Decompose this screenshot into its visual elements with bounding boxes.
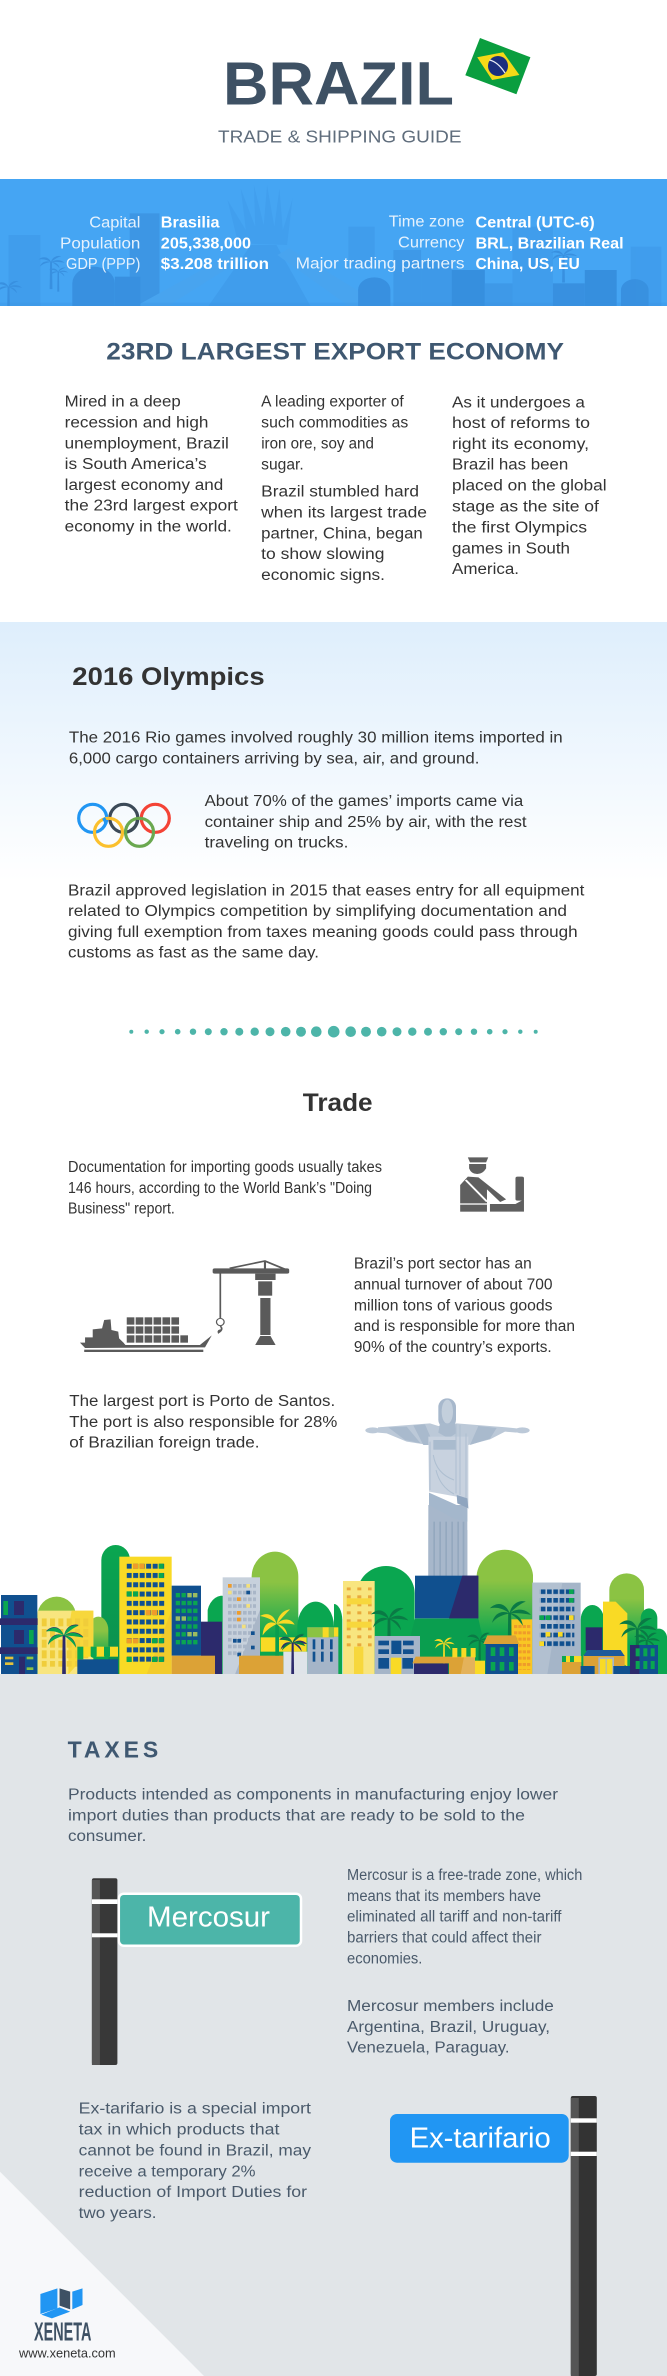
left facts: Capital — [89, 214, 140, 231]
text column 2: partner, China, began — [261, 525, 423, 542]
heading: Trade: Trade — [303, 1089, 373, 1117]
paragraph: legislation — [68, 882, 585, 962]
logo: Xeneta — [18, 2288, 116, 2360]
building: gray low — [375, 1636, 420, 1674]
building: gray tower — [223, 1577, 260, 1674]
left facts: GDP (PPP) — [66, 256, 140, 273]
paragraph: Ex-tarifario definition: reduction of Import Duties for — [79, 2184, 307, 2201]
text column 1: largest economy and — [65, 477, 223, 494]
paragraph: taxes intro: import duties than products that are ready to be sold to the — [68, 1807, 525, 1824]
building: yellow tower — [119, 1557, 172, 1674]
right facts — [296, 214, 624, 273]
paragraph: items imported: 6,000 cargo containers arriving by sea, air, and ground. — [69, 750, 479, 767]
palm: dark — [279, 1635, 307, 1680]
title: BRAZIL — [223, 50, 454, 118]
dotted divider — [129, 1026, 538, 1037]
paragraph: taxes intro — [68, 1786, 558, 1845]
text column 3: the first Olympics — [452, 519, 587, 536]
paragraph: taxes intro: consumer. — [68, 1828, 146, 1845]
small awning shop — [562, 1656, 581, 1674]
heading: 2016 Olympics: 2016 Olympics — [72, 663, 265, 691]
blue building right — [630, 1645, 658, 1674]
subtitle: TRADE & SHIPPING GUIDE — [218, 127, 462, 147]
text column 3: stage as the site of — [452, 499, 600, 516]
paragraph: Porto de Santos: of Brazilian foreign trade. — [69, 1435, 260, 1452]
paragraph: items imported: The 2016 Rio games involved roughly 30 million items imported in — [69, 730, 563, 747]
icon: customs officer — [460, 1157, 524, 1212]
paragraph: Mercosur definition: barriers that could affect their — [347, 1930, 542, 1947]
sign: Ex-tarifario: Ex-tarifario — [410, 2123, 551, 2155]
text column 2: sugar. — [261, 456, 304, 473]
building: dark blue — [0, 1595, 39, 1674]
right facts: Major trading partners — [296, 255, 465, 272]
text column 3: As it undergoes a — [452, 394, 585, 411]
paragraph: Mercosur definition: means that its members have — [347, 1888, 541, 1905]
ship — [80, 1317, 212, 1352]
paragraph: import shares: About 70% of the games’ imports came via — [205, 793, 524, 810]
paragraph: taxes intro: Products intended as components in manufacturing enjoy lower — [68, 1786, 558, 1803]
text column 3: America. — [452, 561, 519, 578]
sign: Mercosur: Mercosur — [147, 1902, 270, 1934]
icon: Olympic rings — [79, 804, 169, 846]
crane — [213, 1261, 289, 1345]
text column 1: recession and high — [65, 414, 208, 431]
building: pale yellow — [38, 1611, 93, 1674]
left facts: Brasilia — [161, 214, 220, 231]
paragraph: Mercosur definition: eliminated all tariff and non-tariff — [347, 1909, 562, 1926]
text column 1: the 23rd largest export — [65, 498, 239, 515]
text column 3 — [452, 394, 607, 578]
paragraph: port sector: annual turnover of about 700 — [354, 1276, 553, 1293]
right facts: Time zone — [389, 214, 464, 231]
paragraph: Porto de Santos — [69, 1393, 338, 1452]
paragraph: legislation: Brazil approved legislation in 2015 that eases entry for all equipment — [68, 882, 585, 899]
paragraph: Porto de Santos: The port is also responsible for 28% — [69, 1414, 338, 1431]
text column 1 — [65, 393, 239, 536]
text column 1: unemployment, Brazil — [65, 435, 229, 452]
paragraph: Ex-tarifario definition: receive a temporary 2% — [79, 2163, 256, 2180]
text column 3: host of reforms to — [452, 415, 590, 432]
paragraph: items imported — [69, 730, 563, 767]
building: gray with awning — [307, 1627, 334, 1674]
icon: Brazilian flag — [465, 38, 530, 94]
icon: Xeneta box — [40, 2288, 83, 2318]
right facts: Currency — [398, 235, 465, 252]
left facts: Population — [60, 235, 140, 252]
paragraph: documentation: 146 hours, according to the World Bank’s "Doing — [68, 1180, 372, 1197]
paragraph: legislation: related to Olympics competition by simplifying documentation and — [68, 903, 567, 920]
illustration: Christ the Redeemer — [365, 1398, 530, 1577]
illustration: city skyline left — [0, 1545, 334, 1685]
paragraph: Ex-tarifario definition: two years. — [79, 2205, 156, 2222]
building: pale yellow tall — [343, 1581, 375, 1674]
text column 2: such commodities as — [261, 414, 409, 431]
paragraph: Mercosur definition: economies. — [347, 1950, 422, 1967]
paragraph: port sector: million tons of various goods — [354, 1297, 553, 1314]
paragraph: Ex-tarifario definition: tax in which products that — [79, 2122, 280, 2139]
heading: export economy: 23RD LARGEST EXPORT ECONOMY — [106, 338, 564, 365]
shop with awning — [77, 1647, 118, 1674]
text column 1: is South America’s — [65, 456, 207, 473]
paragraph: Mercosur members: Mercosur members include — [347, 1998, 554, 2015]
website: www.xeneta.com — [18, 2345, 116, 2360]
text column 2: when its largest trade — [260, 504, 427, 521]
paragraph: import shares: container ship and 25% by air, with the rest — [205, 814, 527, 831]
text column 3: right its economy, — [452, 436, 589, 453]
paragraph: port sector — [354, 1256, 575, 1356]
statue column base — [428, 1530, 467, 1577]
text column 2: iron ore, soy and — [261, 435, 374, 452]
text column 2: A leading exporter of — [261, 393, 404, 410]
text column 1: Mired in a deep — [65, 393, 181, 410]
blue house — [483, 1635, 519, 1674]
text column 2: to show slowing — [261, 546, 384, 563]
heading: Taxes: TAXES — [68, 1736, 158, 1762]
paragraph: Mercosur definition: Mercosur is a free-trade zone, which — [347, 1867, 582, 1884]
paragraph: legislation: customs as fast as the same day. — [68, 945, 319, 962]
building: tall gray right — [532, 1583, 581, 1674]
panel: Olympics — [0, 622, 667, 882]
pedestal — [415, 1576, 478, 1618]
orange shop with door — [583, 1650, 625, 1674]
patterned yellow block — [261, 1637, 307, 1652]
text column 1: economy in the world. — [65, 519, 232, 536]
paragraph: port sector: Brazil’s port sector has an — [354, 1256, 532, 1273]
paragraph: documentation: Documentation for importing goods usually takes — [68, 1159, 382, 1176]
panel: key facts band — [0, 179, 667, 314]
right facts: BRL, Brazilian Real — [476, 235, 624, 252]
paragraph: import shares: traveling on trucks. — [205, 835, 348, 852]
paragraph: port sector: and is responsible for more than — [354, 1318, 575, 1335]
wordmark: XENETA — [34, 2317, 92, 2347]
text column 2: Brazil stumbled hard — [261, 484, 419, 501]
yellow-orange building — [511, 1619, 532, 1674]
text column 3: placed on the global — [452, 478, 607, 495]
yellow tower right — [603, 1602, 627, 1667]
paragraph: Ex-tarifario definition — [79, 2101, 312, 2222]
text column 2 — [260, 393, 427, 584]
paragraph: Ex-tarifario definition: cannot be found in Brazil, may — [79, 2142, 311, 2159]
text column 2: economic signs. — [261, 567, 385, 584]
paragraph: Ex-tarifario definition: Ex-tarifario is a special import — [79, 2101, 312, 2118]
gray taxes background — [0, 1674, 667, 2376]
paragraph: legislation: giving full exemption from taxes meaning goods could pass through — [68, 924, 578, 941]
paragraph: documentation: Business" report. — [68, 1201, 175, 1218]
paragraph: Mercosur members — [347, 1998, 554, 2057]
paragraph: Mercosur members: Argentina, Brazil, Uruguay, — [347, 2019, 550, 2036]
orange block — [172, 1656, 215, 1674]
paragraph: import shares — [205, 793, 527, 852]
palm: yellow — [260, 1609, 295, 1656]
paragraph: Mercosur members: Venezuela, Paraguay. — [347, 2040, 510, 2057]
low shops — [412, 1648, 485, 1674]
right facts: China, US, EU — [476, 256, 580, 273]
paragraph: port sector: 90% of the country’s exports. — [354, 1339, 552, 1356]
left facts — [60, 214, 269, 273]
building: blue with green windows — [172, 1586, 201, 1656]
illustration: city skyline right — [334, 1530, 667, 1678]
panel: footer corner — [0, 2172, 204, 2376]
left facts: $3.208 trillion — [161, 256, 269, 273]
blue skyline backdrop — [0, 214, 662, 306]
sign: Mercosur — [92, 1878, 301, 2065]
paragraph: documentation — [68, 1159, 382, 1218]
right facts: Central (UTC-6) — [476, 214, 595, 231]
left facts: 205,338,000 — [161, 235, 251, 252]
sign: Ex-tarifario — [390, 2096, 597, 2376]
icon: container ship and crane — [80, 1261, 289, 1352]
text column 3: games in South — [452, 540, 570, 557]
text column 3: Brazil has been — [452, 457, 568, 474]
paragraph: Porto de Santos: The largest port is Porto de Santos. — [69, 1393, 335, 1410]
paragraph: Mercosur definition — [347, 1867, 582, 1967]
